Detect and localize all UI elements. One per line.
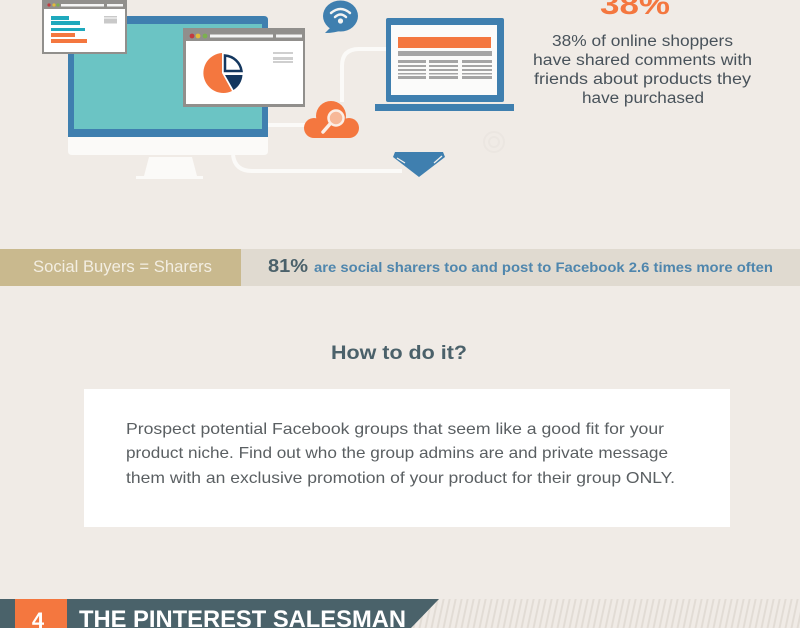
icon: browser window with pie chart [183, 28, 305, 107]
panel: how to do it instructions: Prospect potential Facebook groups that seem like a good fit for your [126, 421, 665, 438]
connector lines [233, 49, 402, 171]
text block: 38% description: have purchased [582, 90, 704, 107]
icon: laptop [375, 18, 514, 111]
banner: social buyers: Social Buyers = Sharers [33, 257, 212, 276]
panel: how to do it instructions: them with an exclusive promotion of your product for their group ONLY. [126, 470, 675, 487]
icon: browser window with bar chart [42, 0, 127, 54]
panel: how to do it instructions: product niche. Find out who the group admins are and private message [126, 445, 668, 462]
text block: 38% description [533, 33, 752, 107]
icon: faint gear [484, 132, 504, 152]
icon: down arrow [393, 152, 445, 177]
icon: cloud with magnifier [304, 101, 359, 138]
section header: the Pinterest salesman [0, 599, 800, 628]
banner: social buyers: 81% [268, 256, 308, 276]
text block: 38% description: have shared comments with [533, 52, 752, 69]
heading: how to do it: How to do it? [331, 343, 467, 364]
banner: social buyers: are social sharers too and post to Facebook 2.6 times more often [314, 260, 773, 275]
icon: desktop monitor [68, 16, 268, 179]
panel: how to do it instructions [84, 389, 730, 527]
text block: 38% description: 38% of online shoppers [552, 33, 733, 50]
text block: 38% description: friends about products they [534, 71, 751, 88]
icon: wifi speech bubble [323, 0, 358, 33]
banner: social buyers [0, 249, 800, 286]
